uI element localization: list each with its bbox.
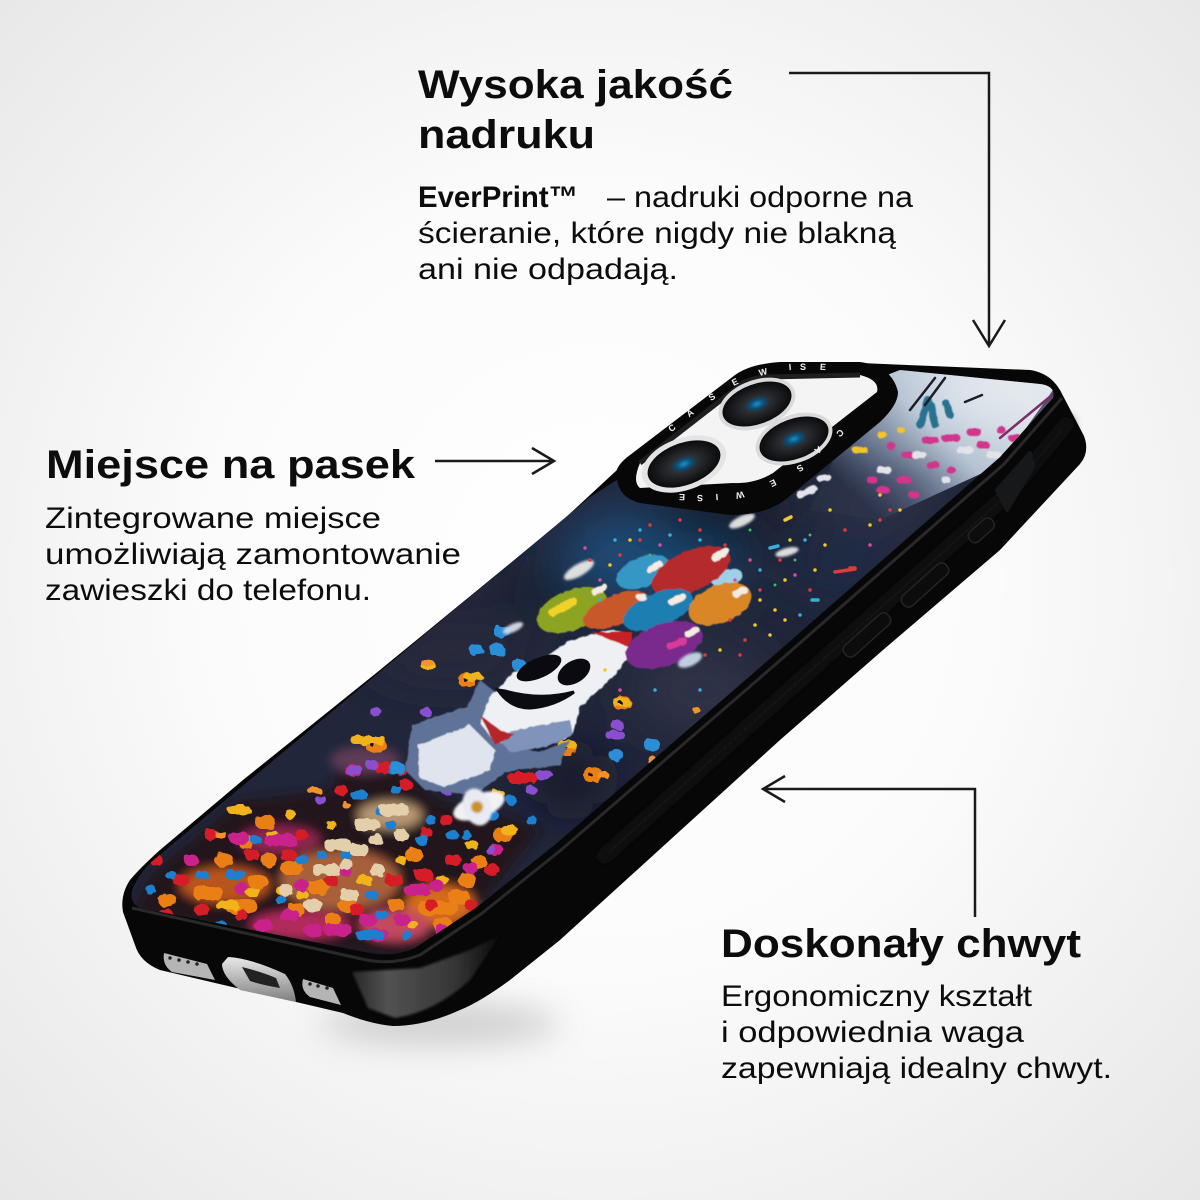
camera ring lettering: W bbox=[734, 489, 745, 501]
body: print quality: – nadruki odporne na bbox=[607, 181, 913, 214]
volume down button bbox=[841, 610, 893, 660]
side button small bbox=[966, 516, 997, 545]
camera ring lettering: E bbox=[730, 376, 740, 388]
body: grip bbox=[721, 980, 1112, 1085]
arrow: print quality bbox=[789, 73, 1005, 346]
window inner rim bbox=[640, 375, 860, 463]
camera ring lettering: S bbox=[707, 391, 717, 403]
heading: print quality: nadruku bbox=[418, 113, 595, 157]
charging port bbox=[222, 957, 296, 1002]
heading: print quality bbox=[418, 63, 733, 157]
body: strap slot: zawieszki do telefonu. bbox=[45, 574, 371, 607]
phone shadow bbox=[320, 1002, 560, 1046]
camera ring lettering: E bbox=[820, 362, 826, 372]
art base bbox=[120, 360, 1080, 970]
camera ring lettering: A bbox=[684, 407, 696, 419]
ghost eyes bbox=[516, 654, 590, 686]
body: grip: zapewniają idealny chwyt. bbox=[721, 1052, 1112, 1085]
camera ring lettering: E bbox=[768, 477, 778, 489]
callout: print quality bbox=[418, 63, 1005, 346]
case rim highlight bbox=[132, 398, 1062, 962]
body: grip: Ergonomiczny kształt bbox=[721, 980, 1033, 1013]
speaker right bbox=[302, 979, 341, 1005]
camera ring bbox=[616, 362, 898, 515]
lens right bbox=[748, 403, 840, 475]
camera ring lettering: S bbox=[800, 362, 806, 372]
camera ring lettering: W bbox=[758, 366, 769, 378]
camera surround bbox=[616, 362, 898, 515]
camera ring lettering bbox=[666, 362, 846, 503]
body: grip: i odpowiednia waga bbox=[721, 1016, 1024, 1049]
meadow underpainting bbox=[130, 746, 540, 960]
camera ring lettering: C bbox=[666, 422, 678, 434]
body: strap slot: umożliwiają zamontowanie bbox=[45, 538, 461, 571]
case body bbox=[122, 362, 1086, 1026]
camera ring lettering: S bbox=[795, 462, 805, 474]
printed artwork bbox=[120, 360, 1080, 970]
body: print quality bbox=[418, 181, 913, 286]
camera ring lettering: C bbox=[834, 427, 846, 439]
daisies bbox=[450, 511, 800, 830]
art sky bbox=[829, 370, 1052, 518]
lens left bbox=[634, 425, 734, 503]
camera ring lettering: I bbox=[715, 492, 719, 502]
body: print quality: ani nie odpadają. bbox=[418, 253, 678, 286]
heading: grip: Doskonały chwyt bbox=[721, 922, 1081, 966]
speaker left bbox=[164, 953, 215, 980]
volume up button bbox=[899, 560, 951, 610]
flower meadow bbox=[150, 632, 697, 935]
callout: grip bbox=[721, 776, 1112, 1085]
camera ring lettering: A bbox=[812, 444, 824, 456]
heading: strap slot: Miejsce na pasek bbox=[46, 443, 416, 487]
arrow: strap slot bbox=[435, 448, 554, 474]
case side sheen bbox=[600, 420, 1070, 860]
side switch bbox=[997, 453, 1033, 510]
camera window bbox=[636, 375, 877, 488]
callout: strap slot bbox=[45, 443, 554, 607]
camera ring lettering: S bbox=[697, 493, 703, 503]
camera ring lettering: I bbox=[788, 362, 792, 372]
body: strap slot: Zintegrowane miejsce bbox=[45, 502, 381, 535]
phone with case bbox=[122, 362, 1086, 1026]
lens top bbox=[711, 368, 803, 440]
art haze bbox=[500, 372, 1054, 819]
balloons bbox=[536, 544, 752, 670]
bottom corner gloss bbox=[352, 935, 500, 1018]
arrow: grip bbox=[763, 776, 975, 917]
heading: print quality: Wysoka jakość bbox=[418, 63, 733, 107]
body: print quality: ścieranie, które nigdy nie blakną bbox=[418, 217, 896, 250]
camera ring lettering: E bbox=[679, 492, 685, 502]
body: print quality: EverPrint™ bbox=[418, 181, 578, 214]
body: strap slot bbox=[45, 502, 461, 607]
sky flowers and paint specks bbox=[585, 378, 1052, 690]
speaker holes bbox=[170, 958, 327, 988]
ghost mouth bbox=[498, 690, 574, 708]
ghost body bbox=[405, 630, 632, 795]
